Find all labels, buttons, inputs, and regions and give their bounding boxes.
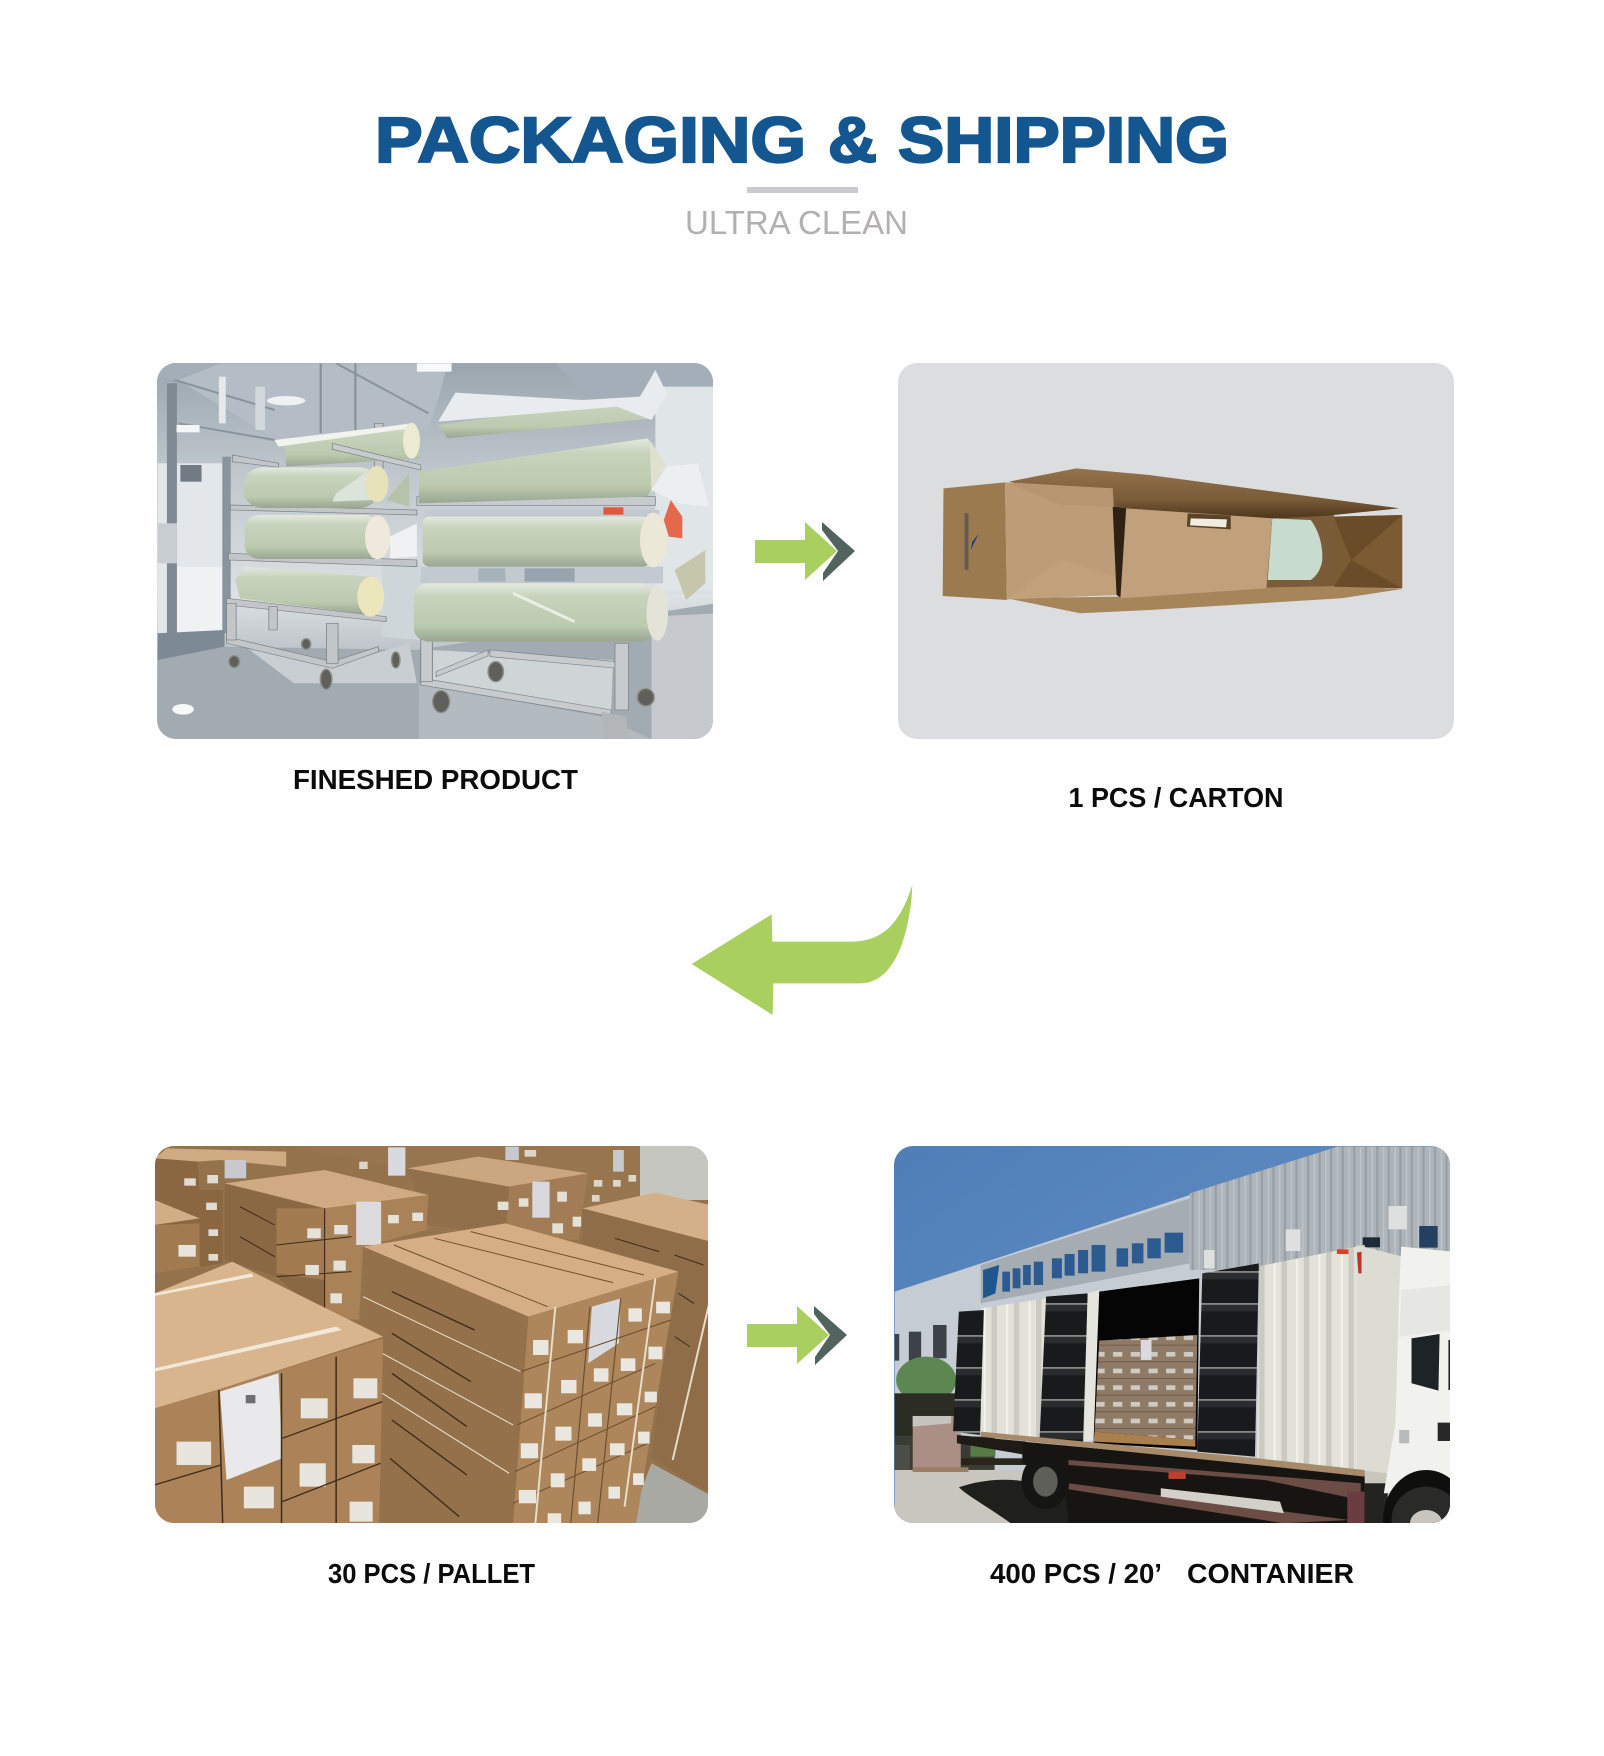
left rack frame xyxy=(227,423,417,668)
wheels xyxy=(229,639,654,713)
chassis xyxy=(957,1435,1026,1455)
title: & xyxy=(828,104,877,176)
cylinders xyxy=(284,423,421,467)
caption: 30 PCS / PALLET xyxy=(328,1558,535,1589)
front left pallet xyxy=(155,1262,383,1408)
photo: stacked pallets xyxy=(152,1143,713,1527)
photo: truck at warehouse xyxy=(894,1146,1450,1523)
right rack frame xyxy=(417,497,655,717)
caption: 400 PCS / 20’ xyxy=(990,1558,1162,1589)
title: PACKAGING xyxy=(375,104,806,176)
caption: CONTANIER xyxy=(1187,1558,1354,1589)
container xyxy=(981,1298,1046,1440)
rear left pallet xyxy=(225,1170,428,1208)
photo: open carton xyxy=(898,363,1454,739)
caption xyxy=(990,1558,1354,1589)
title xyxy=(375,104,1229,176)
cab xyxy=(1365,1483,1388,1523)
back center pallet xyxy=(407,1157,588,1187)
panel: pallet xyxy=(152,1143,713,1589)
subtitle: ULTRA CLEAN xyxy=(685,204,908,241)
right pallet xyxy=(582,1193,710,1242)
panel: finished product xyxy=(155,360,721,795)
panel: container truck xyxy=(892,1143,1469,1589)
centre pallet xyxy=(363,1223,678,1317)
caption: 1 PCS / CARTON xyxy=(1068,782,1284,813)
arrow: finished product to carton xyxy=(755,522,855,581)
arrow: carton to pallet xyxy=(692,885,912,1015)
title divider xyxy=(747,187,858,193)
back row xyxy=(638,1146,640,1196)
arrow: pallet to container xyxy=(747,1306,847,1365)
photo: membrane rolls on racks xyxy=(155,360,721,743)
caption: FINESHED PRODUCT xyxy=(293,764,578,795)
title: SHIPPING xyxy=(898,104,1229,176)
panel: carton xyxy=(898,363,1454,813)
